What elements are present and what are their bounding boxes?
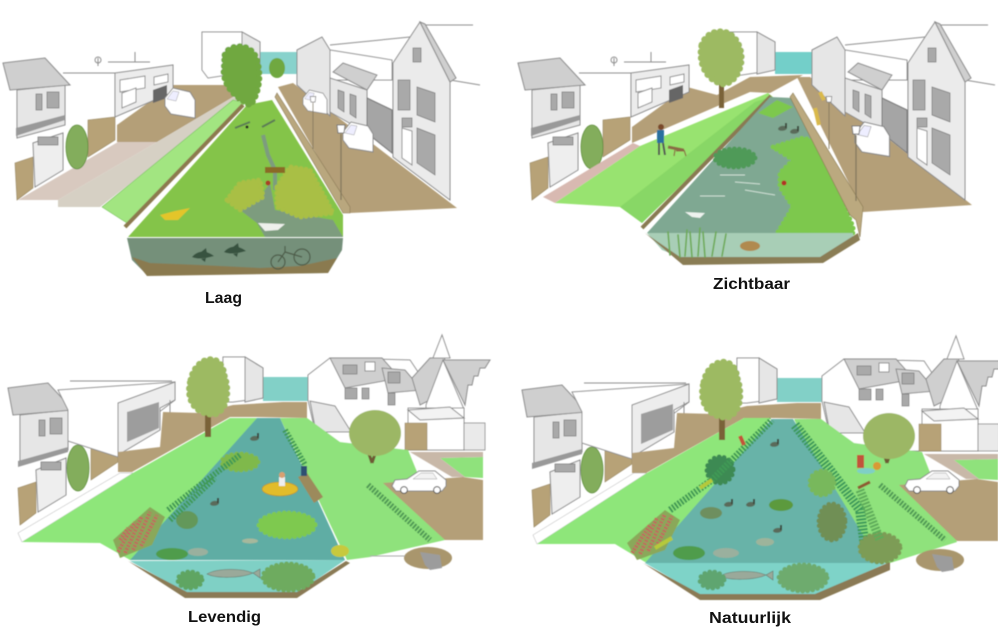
bank wall (642, 96, 771, 228)
shop building (579, 52, 689, 117)
panel: Zichtbaar (518, 22, 995, 265)
yellow algae mats (227, 167, 333, 217)
tan street left (632, 75, 803, 143)
lawn corner (440, 457, 483, 478)
street lamps (310, 96, 345, 200)
canal cross section (127, 238, 343, 275)
driveway (383, 477, 483, 540)
garden tree (863, 413, 915, 463)
grass bank right (794, 419, 957, 563)
floating litter (160, 120, 285, 231)
underwater reeds (668, 228, 726, 257)
yellow inflatable boat with child (262, 472, 298, 496)
left house and hedge (3, 58, 115, 200)
canal cross section (130, 560, 345, 593)
street lamps (826, 96, 860, 201)
left bank vegetation (627, 420, 772, 560)
waterlily patch far (758, 100, 793, 118)
right houses (822, 336, 998, 451)
path to street (924, 454, 998, 479)
grass bank right (280, 418, 445, 560)
ducks (210, 433, 259, 506)
culvert outlet (916, 549, 964, 572)
waterplant clump (715, 149, 755, 167)
small far tree (269, 58, 285, 78)
floating plants (673, 499, 793, 560)
green reed fringe (168, 430, 305, 520)
grass bank (102, 100, 245, 223)
underwater plants (178, 564, 313, 590)
lawn corner (954, 459, 998, 480)
ripples and floating objects (685, 123, 799, 218)
heading: Zichtbaar: Zichtbaar (713, 276, 790, 293)
cyclists on far quay (815, 92, 824, 125)
right buildings (297, 22, 480, 200)
right street (278, 83, 457, 213)
heading: Natuurlijk: Natuurlijk (709, 610, 791, 627)
open grey water (240, 183, 343, 237)
willow tree (224, 47, 259, 105)
road left (58, 97, 240, 207)
sediment edge (128, 561, 350, 598)
sediment layer (645, 233, 860, 265)
driveway (899, 479, 998, 541)
dead fish (192, 243, 246, 262)
sunken bicycle (271, 246, 310, 269)
path to street (410, 452, 483, 477)
parked vans (303, 90, 373, 152)
tan embankment path (632, 403, 821, 473)
canal cross section (647, 233, 853, 257)
panel: Levendig (8, 335, 490, 598)
person walking dog (657, 124, 686, 156)
water surface (130, 418, 345, 560)
underwater plants (700, 565, 827, 591)
heading: Laag: Laag (205, 290, 242, 307)
left house, hedge and garage (522, 383, 689, 527)
water surface (647, 97, 853, 233)
waterlily patches (156, 454, 315, 560)
roadside ditch reeds (880, 485, 945, 540)
right quay wall (275, 93, 350, 213)
right bank vegetation (795, 425, 900, 562)
red flowering reeds (113, 507, 165, 558)
right quay wall (790, 93, 863, 237)
parked van (855, 122, 890, 156)
ducks (724, 439, 782, 533)
sediment edge (643, 562, 890, 600)
tan street left (117, 85, 233, 142)
street tree (703, 362, 740, 440)
grass bank (555, 93, 773, 223)
parked car (392, 471, 446, 493)
children at waterside (740, 436, 881, 488)
pavement (543, 143, 640, 203)
left house, hedge and garage (8, 381, 175, 525)
sediment layer (132, 257, 337, 276)
white strip (18, 473, 133, 542)
canal cross section (645, 563, 887, 595)
tan embankment path (118, 402, 307, 472)
heading: Levendig: Levendig (188, 609, 261, 626)
white van left (165, 88, 195, 118)
back block and teal trees (223, 357, 310, 402)
bank wall (125, 105, 243, 227)
back block and teal trees (737, 358, 824, 403)
narrow water channel (263, 135, 275, 190)
distant teal trees and back block (725, 32, 813, 76)
person on jetty (301, 466, 307, 476)
darker bank band (620, 97, 770, 223)
left house and hedge (518, 58, 630, 200)
white strip (533, 473, 647, 544)
fallen tree jetty (298, 473, 323, 503)
roadside ditch reeds (368, 485, 430, 540)
pavement left (18, 142, 157, 200)
tree (701, 32, 741, 108)
carp (740, 241, 760, 251)
distant teal trees and back block (202, 32, 297, 78)
waterlily patch right (773, 138, 853, 233)
panel: Natuurlijk (522, 336, 998, 600)
right street (797, 77, 972, 212)
culvert outlet (370, 547, 452, 570)
street tree (190, 360, 227, 437)
duckweed water surface (128, 100, 343, 237)
right buildings (812, 22, 995, 200)
grass bank left (537, 418, 771, 562)
shop building (63, 52, 173, 117)
pike (207, 569, 260, 578)
right houses (308, 335, 490, 450)
yellow marsh flowers (331, 545, 349, 557)
panel: Laag (3, 22, 480, 276)
parked car (905, 471, 959, 493)
pike (720, 571, 773, 580)
grass bank left (22, 418, 257, 560)
water surface (645, 419, 880, 563)
garden tree (349, 410, 401, 463)
